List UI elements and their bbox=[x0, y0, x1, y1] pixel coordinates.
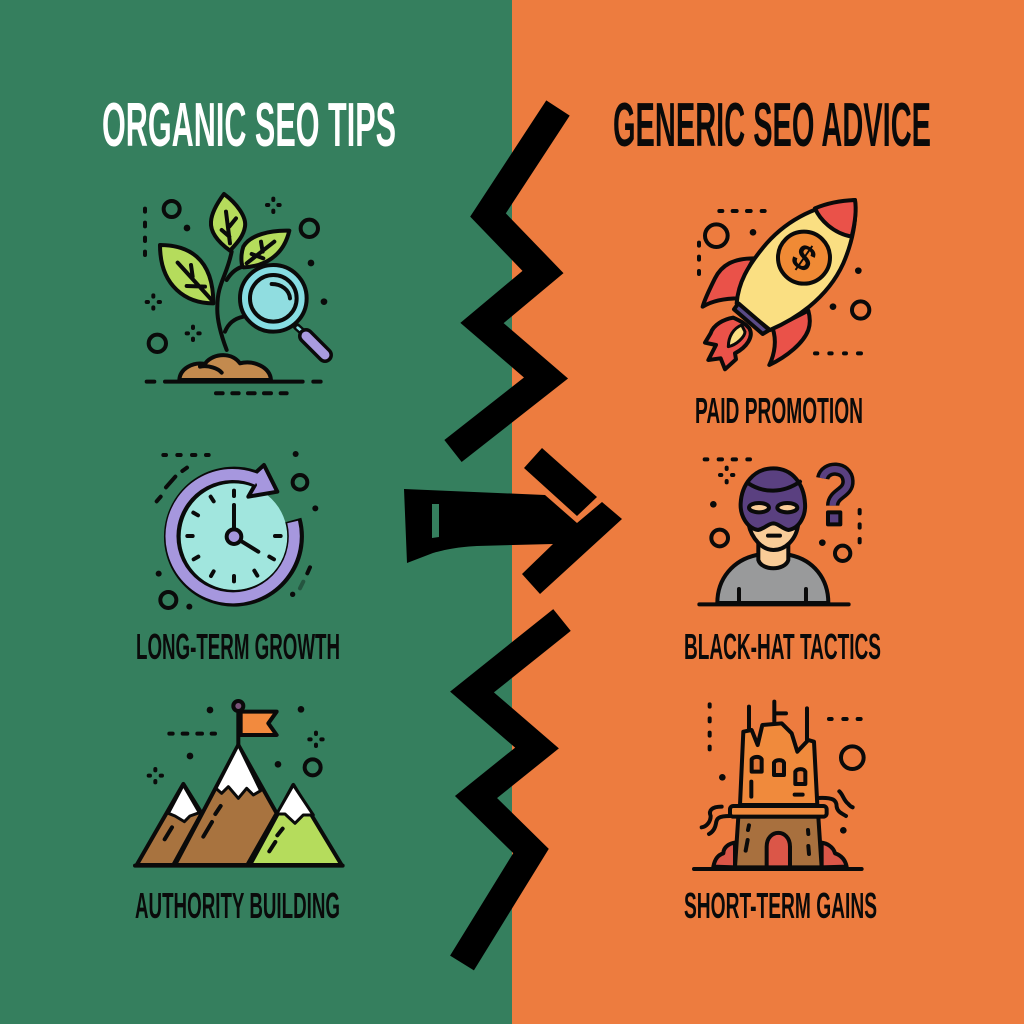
divider: lower zigzag bbox=[462, 620, 562, 963]
icon: plant with magnifying glass bbox=[145, 194, 327, 393]
label: authority building: AUTHORITY BUILDING bbox=[135, 885, 340, 926]
icon: rocket with dollar sign bbox=[699, 200, 869, 369]
divider: upper zigzag bbox=[453, 108, 558, 451]
panel: organic background bbox=[0, 0, 512, 1024]
arrow: central arrow pointing right bbox=[404, 448, 622, 594]
icon: rocket with dollar sign: $ bbox=[784, 235, 824, 280]
icon: clock with circular arrow bbox=[156, 451, 318, 610]
panel: generic background bbox=[512, 0, 1024, 1024]
label: long-term growth: LONG-TERM GROWTH bbox=[136, 626, 340, 667]
infographic canvas: ORGANIC SEO TIPS bbox=[102, 91, 396, 160]
icon: crumbling tower bbox=[694, 702, 864, 869]
icon: masked figure with question mark bbox=[699, 459, 860, 604]
label: paid promotion: PAID PROMOTION bbox=[695, 390, 863, 431]
icon: mountains with flag bbox=[135, 701, 343, 866]
